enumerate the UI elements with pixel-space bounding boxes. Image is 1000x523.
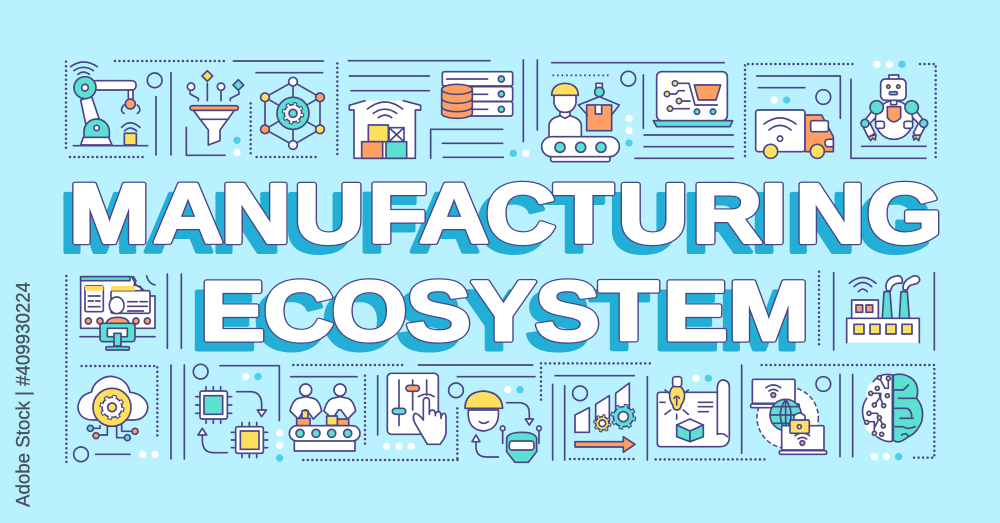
- title shadow: ECOSYSTEM: [191, 275, 800, 368]
- title outline: MANUFACTURING: [69, 168, 942, 261]
- icon: touch control panel: [387, 373, 446, 444]
- icon: e-commerce laptop: [653, 72, 733, 127]
- middle row right icon: [819, 272, 934, 350]
- top icon row left: [66, 61, 337, 157]
- title outline: [69, 168, 942, 358]
- icon: smart factory: [847, 276, 920, 343]
- icon: growth chart with gears: [575, 383, 635, 452]
- title outline: ECOSYSTEM: [200, 265, 809, 358]
- icon: assembly workers: [289, 384, 360, 451]
- bottom icon row right: [647, 365, 934, 460]
- stock id text: Adobe Stock | #409930224: [12, 282, 34, 507]
- icon: worker at conveyor: [542, 83, 619, 162]
- title: MANUFACTURING: [69, 168, 942, 261]
- title: [69, 168, 942, 358]
- icon: robotic arm: [71, 62, 148, 146]
- bottom icon row left: [74, 364, 458, 462]
- icon: computer interface: [80, 276, 155, 350]
- icon: servers and database: [442, 72, 513, 118]
- title shadow: MANUFACTURING: [59, 177, 933, 270]
- icon: blueprint with bulb and cube: [657, 377, 729, 447]
- top icon row right: [640, 61, 936, 160]
- title shadow: [59, 177, 933, 368]
- icon: worker and robot exchange: [465, 391, 541, 462]
- top icon row middle: [348, 60, 640, 162]
- middle row icons: [66, 274, 181, 463]
- icon: data funnel: [187, 71, 244, 156]
- icon: secure network laptops: [751, 379, 827, 454]
- icon: cloud gear: [78, 376, 148, 441]
- bottom icon row middle: [365, 363, 650, 462]
- title: ECOSYSTEM: [200, 265, 809, 358]
- icon: brain circuit: [862, 374, 923, 442]
- icon: gear network: [261, 77, 324, 149]
- icon: robot: [861, 75, 928, 141]
- icon: connected truck: [756, 110, 833, 158]
- icon: microchips: [196, 387, 268, 458]
- icon: smart warehouse: [349, 101, 421, 158]
